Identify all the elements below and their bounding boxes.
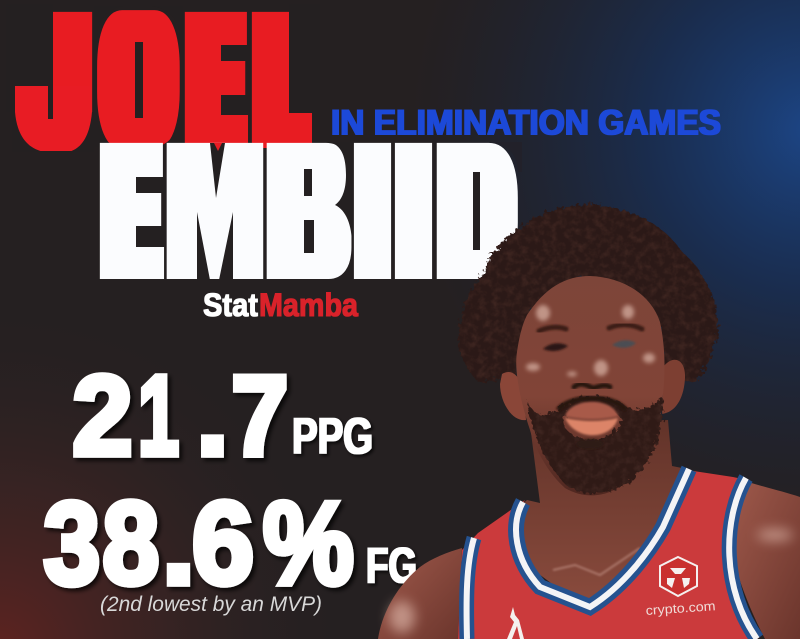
chest shine: [553, 548, 640, 575]
jersey logo: crypto.com: [645, 557, 716, 618]
note: 2nd lowest by an MVP: (2nd lowest by an MVP): [100, 593, 322, 616]
logo: StatMamba: Stat: [203, 287, 258, 323]
stat: 38.6% FG: 3: [44, 478, 100, 608]
stat: 38.6% FG: .: [162, 478, 195, 608]
stat: 21.7 PPG: PPG: [292, 408, 373, 464]
eyes: [543, 340, 636, 351]
facial highlights: [526, 305, 655, 376]
face: [516, 276, 664, 495]
stat: 21.7 PPG: 2: [72, 352, 132, 478]
stat: 21.7 PPG: 1: [138, 352, 179, 478]
nose: [574, 384, 610, 388]
logo: StatMamba: Mamba: [259, 287, 358, 323]
logo: StatMamba: [203, 287, 358, 323]
jersey right armhole trim: [729, 478, 757, 639]
chin shadow: [576, 439, 604, 449]
beard: [527, 396, 663, 494]
title: EMBIID: I: [408, 119, 418, 302]
neck and chest: [510, 420, 692, 612]
jersey neck trim: [516, 469, 689, 607]
title: EMBIID: E: [112, 119, 150, 302]
mustache: [558, 398, 626, 410]
arm highlights: [389, 529, 793, 633]
text: D: [447, 119, 505, 302]
right ear: [662, 360, 685, 414]
stat: 21.7 PPG: [72, 352, 373, 478]
right arm: [728, 482, 800, 639]
jersey logo: crypto.com: crypto.com: [645, 598, 716, 618]
stat: 21.7 PPG: 7: [232, 352, 288, 478]
player photo illustration: [378, 204, 800, 639]
stat: 21.7 PPG: .: [196, 352, 228, 478]
hair: [458, 204, 718, 382]
eyebrows: [539, 325, 642, 331]
jordan logo: [507, 607, 524, 639]
stat: 38.6% FG: 6: [192, 478, 254, 608]
jersey body: [458, 470, 758, 639]
jersey left armhole trim: [467, 538, 474, 639]
left arm: [378, 548, 462, 639]
title: EMBIID: M: [176, 119, 253, 302]
title: EMBIID: I: [368, 119, 378, 302]
subtitle: in elimination games: IN ELIMINATION GAMES: [331, 104, 721, 142]
stat: 38.6% FG: 8: [102, 478, 159, 608]
lips: [565, 402, 618, 435]
stat: 38.6% FG: %: [263, 478, 354, 608]
left ear: [500, 372, 526, 420]
stat: 38.6% FG: [44, 478, 417, 608]
title: EMBIID: B: [277, 119, 339, 302]
stat: 38.6% FG: FG: [366, 538, 417, 594]
